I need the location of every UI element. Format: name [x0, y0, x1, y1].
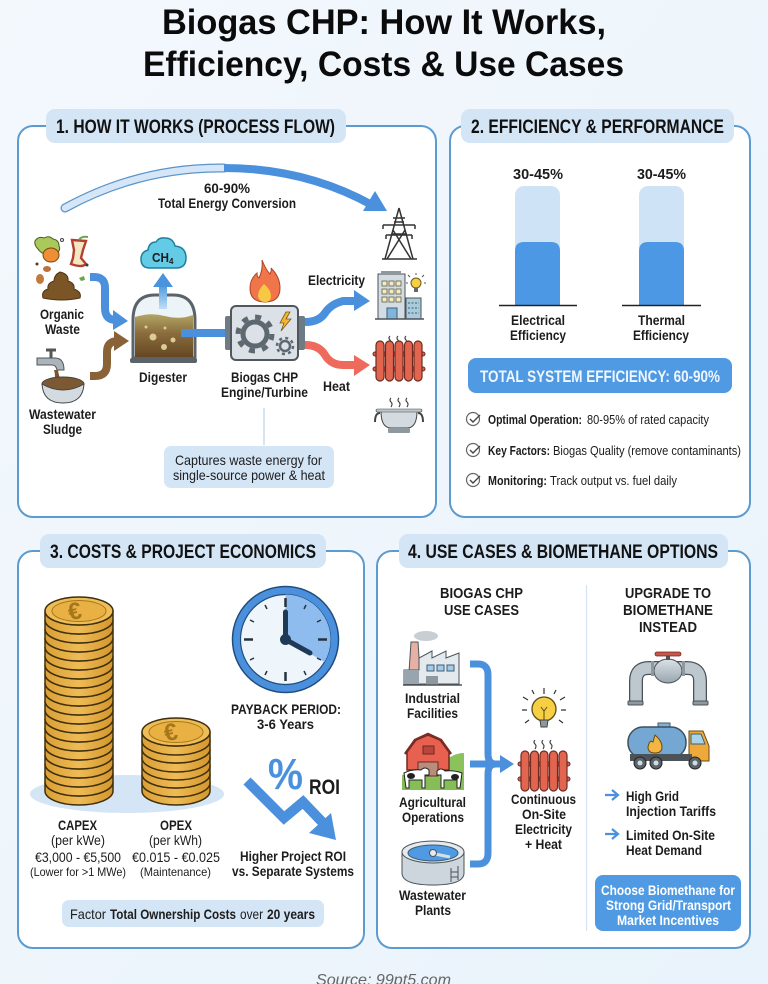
label: OPEX: OPEX	[160, 817, 193, 833]
icon: flame	[250, 260, 280, 302]
icon: tanker truck	[628, 723, 709, 769]
panel: how it works	[18, 109, 436, 517]
label: OPEX: (Maintenance)	[140, 865, 211, 879]
item: optimal operation: 80-95% of rated capacity	[587, 413, 710, 427]
label: continuous on-site	[511, 791, 576, 852]
arrow: total energy conversion arc	[65, 168, 387, 211]
icon: payback clock	[232, 586, 338, 692]
item: monitoring	[466, 474, 678, 488]
coin stack shadow	[30, 775, 224, 813]
icon: hot water pot	[375, 398, 423, 433]
label: higher ROI: vs. Separate Systems	[232, 863, 354, 879]
callout: choose biomethane: Strong Grid/Transport	[606, 897, 731, 913]
bullet: limited on-site heat demand: Limited On-Site	[626, 827, 715, 843]
title	[143, 3, 624, 84]
icon: CH4 cloud	[141, 238, 186, 268]
label: total energy conversion: 60-90%	[204, 180, 251, 196]
icon: CAPEX coin stack	[45, 597, 113, 805]
label: higher ROI	[232, 848, 354, 879]
heading: efficiency	[461, 109, 734, 143]
subheading: biogas CHP use cases	[440, 585, 523, 619]
callout: total ownership costs: 20 years	[267, 906, 315, 922]
bar chart: electrical efficiency: Electrical	[511, 312, 565, 328]
bullet: high grid injection tariffs: High Grid	[626, 788, 679, 804]
callout: total ownership costs	[62, 900, 324, 927]
item: optimal operation	[466, 412, 710, 427]
bar chart: thermal efficiency: Efficiency	[633, 327, 689, 343]
title: Efficiency, Costs & Use Cases	[143, 45, 624, 84]
label: agricultural operations: Operations	[402, 809, 464, 825]
icon: digester tank	[130, 295, 197, 363]
label: CAPEX: CAPEX	[58, 817, 98, 833]
subheading: upgrade to biomethane: BIOMETHANE	[623, 602, 713, 619]
icon: OPEX coin stack	[142, 718, 210, 805]
label: organic waste: Organic	[40, 306, 84, 322]
title: Biogas CHP: How It Works,	[162, 3, 606, 42]
icon: CH4 cloud: CH	[152, 250, 169, 265]
icon: wastewater tap and bowl	[37, 350, 84, 403]
label: wastewater plants: Wastewater	[399, 887, 466, 903]
label: wastewater plants	[399, 887, 466, 918]
bullet: limited on-site heat demand	[605, 827, 715, 858]
label: heat: Heat	[323, 378, 350, 394]
item: monitoring: Monitoring:	[488, 474, 547, 488]
icon: wastewater treatment tank	[402, 841, 464, 885]
icon: CAPEX coin stack: €	[65, 597, 84, 626]
bullet: high grid injection tariffs: Injection Tariffs	[626, 803, 716, 819]
label: higher ROI: Higher Project ROI	[240, 848, 346, 864]
callout: choose biomethane: Choose Biomethane for	[601, 882, 735, 898]
arrow: use case bracket	[470, 664, 514, 864]
label: CAPEX: (per kWe)	[51, 832, 105, 848]
icon: radiator	[373, 336, 425, 381]
label: wastewater sludge: Wastewater	[29, 406, 96, 422]
connector line	[263, 408, 265, 445]
icon: CHP engine	[225, 306, 305, 360]
item: key factors	[466, 444, 741, 458]
bullet: high grid injection tariffs	[605, 788, 716, 819]
panel: efficiency and performance	[450, 109, 750, 517]
label: CAPEX	[30, 817, 126, 879]
bullet: limited on-site heat demand: Heat Demand	[626, 842, 702, 858]
callout: captures waste energy	[164, 446, 334, 488]
icon: organic waste	[35, 237, 88, 300]
label: total energy conversion: Total Energy Conversion	[158, 195, 296, 211]
bar chart: thermal efficiency: Thermal	[638, 312, 685, 328]
label: payback period	[231, 701, 341, 732]
callout: choose biomethane: Market Incentives	[617, 912, 719, 928]
label: total energy conversion	[158, 180, 296, 211]
label: wastewater sludge	[29, 406, 96, 437]
callout: choose biomethane	[595, 875, 741, 931]
icon: light bulb	[522, 688, 566, 727]
icon: percent ROI: %	[268, 750, 303, 799]
panel: use cases and biomethane	[377, 534, 750, 948]
label: organic waste	[40, 306, 84, 337]
label: industrial facilities: Facilities	[407, 705, 458, 721]
label: payback period: PAYBACK PERIOD:	[231, 701, 341, 717]
subheading: upgrade to biomethane: INSTEAD	[639, 619, 697, 636]
arrow: organic waste to digester	[90, 277, 128, 330]
item: monitoring: Track output vs. fuel daily	[550, 474, 678, 488]
label: digester: Digester	[139, 369, 187, 385]
label: industrial facilities: Industrial	[405, 690, 460, 706]
label: CAPEX: (Lower for >1 MWe)	[30, 865, 126, 879]
label: electricity: Electricity	[308, 272, 365, 288]
label: engine	[221, 369, 308, 400]
icon: radiator	[518, 740, 570, 791]
heading: costs: 3. COSTS & PROJECT ECONOMICS	[50, 542, 316, 563]
icon: percent ROI: ROI	[309, 776, 340, 799]
icon: percent ROI	[268, 750, 340, 799]
banner: total system efficiency	[468, 358, 732, 393]
label: payback period: 3-6 Years	[257, 716, 314, 732]
label: OPEX: (per kWh)	[149, 832, 202, 848]
heading: use cases	[399, 534, 728, 568]
label: industrial facilities	[405, 690, 460, 721]
subheading: biogas CHP use cases: BIOGAS CHP	[440, 585, 523, 602]
icon: barn with cows	[402, 734, 464, 790]
arrow: sludge to digester	[90, 331, 129, 376]
heading: how it works	[46, 109, 346, 143]
subheading: biogas CHP use cases: USE CASES	[444, 602, 519, 619]
heading: how it works: 1. HOW IT WORKS (PROCESS FLOW)	[56, 117, 335, 138]
arrow: heat output	[305, 345, 370, 376]
label: wastewater plants: Plants	[415, 902, 451, 918]
item: key factors: Biogas Quality (remove contaminants)	[553, 444, 741, 458]
arrow: methane rising	[153, 273, 173, 309]
label: OPEX: €0.015 - €0.025	[132, 849, 220, 865]
icon: gas pipe valve	[628, 652, 708, 705]
checklist	[466, 412, 741, 488]
icon: OPEX coin stack: €	[161, 718, 180, 747]
label: OPEX	[132, 817, 220, 879]
arrow: ROI zigzag	[247, 781, 336, 840]
heading: costs	[40, 534, 326, 568]
callout: captures waste energy: single-source power & heat	[173, 467, 325, 483]
label: continuous on-site: + Heat	[525, 836, 562, 852]
label: engine: Biogas CHP	[231, 369, 298, 385]
bar chart: thermal efficiency	[622, 166, 701, 343]
label: continuous on-site: Continuous	[511, 791, 576, 807]
item: key factors: Key Factors:	[488, 444, 550, 458]
label: CAPEX: €3,000 - €5,500	[35, 849, 121, 865]
callout: total ownership costs: Total Ownership Costs	[110, 906, 236, 922]
item: optimal operation: Optimal Operation:	[488, 413, 582, 427]
panel: costs and economics	[18, 534, 364, 948]
pipe: digester to engine	[181, 329, 226, 337]
callout: captures waste energy: Captures waste energy for	[175, 452, 322, 468]
label: organic waste: Waste	[45, 321, 80, 337]
bar chart: electrical efficiency: 30-45%	[513, 166, 563, 183]
label: engine: Engine/Turbine	[221, 384, 308, 400]
subheading: upgrade to biomethane: UPGRADE TO	[625, 585, 711, 602]
bar chart: thermal efficiency: 30-45%	[637, 166, 686, 183]
label: agricultural operations	[399, 794, 466, 825]
label: agricultural operations: Agricultural	[399, 794, 466, 810]
callout: total ownership costs: Factor	[70, 906, 106, 922]
label: continuous on-site: Electricity	[515, 821, 572, 837]
bar chart: electrical efficiency	[499, 166, 577, 343]
callout: total ownership costs: over	[240, 906, 263, 922]
icon: building with bulb	[375, 271, 426, 319]
label: wastewater sludge: Sludge	[43, 421, 82, 437]
icon: CH4 cloud: 4	[169, 257, 174, 266]
bar chart: electrical efficiency: Efficiency	[510, 327, 566, 343]
icon: factory	[403, 631, 462, 685]
icon: pylon	[382, 208, 417, 259]
label: continuous on-site: On-Site	[522, 806, 566, 822]
subheading: upgrade to biomethane	[623, 585, 713, 636]
arrow: electricity output	[305, 290, 370, 322]
